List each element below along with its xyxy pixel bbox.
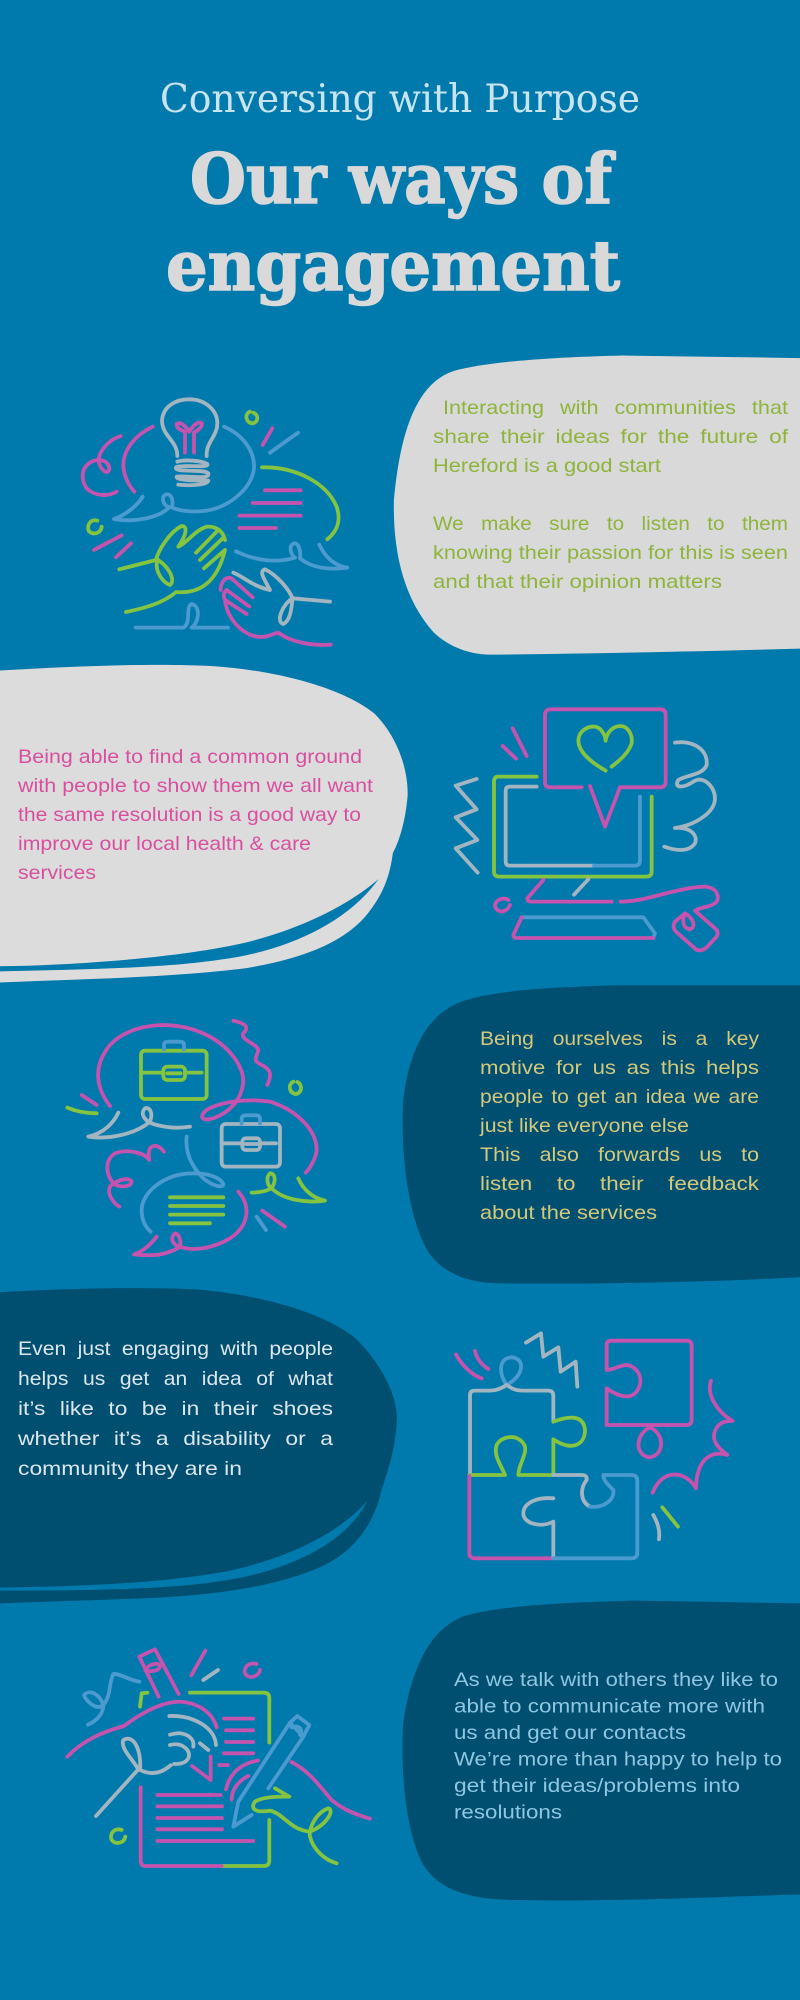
- text: contacts: resolutions: [454, 1802, 562, 1824]
- text: disability: [17, 1338, 334, 1480]
- panel: disability bubble: [0, 1288, 397, 1603]
- text: being ourselves: people to get an idea we are: [480, 1086, 759, 1108]
- text: disability: community they are in: [18, 1458, 242, 1480]
- text: common ground: services: [18, 862, 96, 884]
- swoosh: [0, 879, 379, 971]
- text: being ourselves: Being ourselves is a key: [480, 1028, 759, 1050]
- text: being ourselves: listen to their feedback: [480, 1173, 759, 1195]
- text: communities: knowing their passion for this is seen: [433, 542, 788, 564]
- text: disability: it’s like to be in their shoes: [18, 1398, 333, 1420]
- text: common ground: the same resolution is a good way to: [18, 804, 361, 826]
- icon: speech bubbles and briefcases: [67, 1021, 325, 1255]
- text: disability: Even just engaging with people: [18, 1338, 333, 1360]
- text: common ground: with people to show them we all want: [17, 775, 374, 797]
- text: common ground: improve our local health & care: [18, 833, 311, 855]
- text: contacts: able to communicate more with: [454, 1696, 765, 1718]
- text: contacts: get their ideas/problems into: [454, 1775, 740, 1797]
- title block: [160, 77, 640, 307]
- text: contacts: us and get our contacts: [454, 1722, 686, 1744]
- icon: writing hand and document: [67, 1649, 370, 1866]
- text: communities: We make sure to listen to them: [433, 513, 788, 535]
- text: common ground: Being able to find a common ground: [18, 746, 362, 768]
- text: being ourselves: This also forwards us to: [480, 1144, 759, 1166]
- text: communities: and that their opinion matters: [433, 571, 722, 593]
- text: contacts: [454, 1669, 782, 1824]
- main heading: [166, 139, 620, 307]
- text: contacts: We’re more than happy to help to: [454, 1748, 782, 1770]
- main heading: engagement: [166, 226, 620, 307]
- text: being ourselves: [479, 1028, 759, 1224]
- text: contacts: As we talk with others they like to: [454, 1669, 778, 1691]
- icon: jigsaw puzzle: [456, 1333, 733, 1558]
- text: being ourselves: just like everyone else: [479, 1115, 689, 1137]
- text: communities: [433, 397, 789, 593]
- panel: communities bubble: [394, 356, 800, 655]
- text: being ourselves: motive for us as this helps: [480, 1057, 759, 1079]
- swoosh: [0, 1501, 367, 1591]
- icon: lightbulb and hands: [83, 399, 347, 645]
- panel: common ground bubble: [0, 665, 408, 982]
- text: disability: whether it’s a disability or a: [17, 1428, 333, 1450]
- panel: being ourselves bubble: [403, 985, 800, 1284]
- main heading: Our ways of: [190, 139, 616, 220]
- panel: contacts bubble: [402, 1601, 800, 1900]
- text: communities: Hereford is a good start: [433, 455, 662, 477]
- subtitle: Conversing with Purpose: [160, 77, 640, 122]
- text: common ground: [17, 746, 374, 884]
- icon: computer with heart: [456, 709, 718, 950]
- text: being ourselves: about the services: [480, 1202, 657, 1224]
- text: communities: share their ideas for the future of: [433, 426, 789, 448]
- text: communities: Interacting with communities that: [443, 397, 789, 419]
- text: disability: helps us get an idea of what: [18, 1368, 334, 1390]
